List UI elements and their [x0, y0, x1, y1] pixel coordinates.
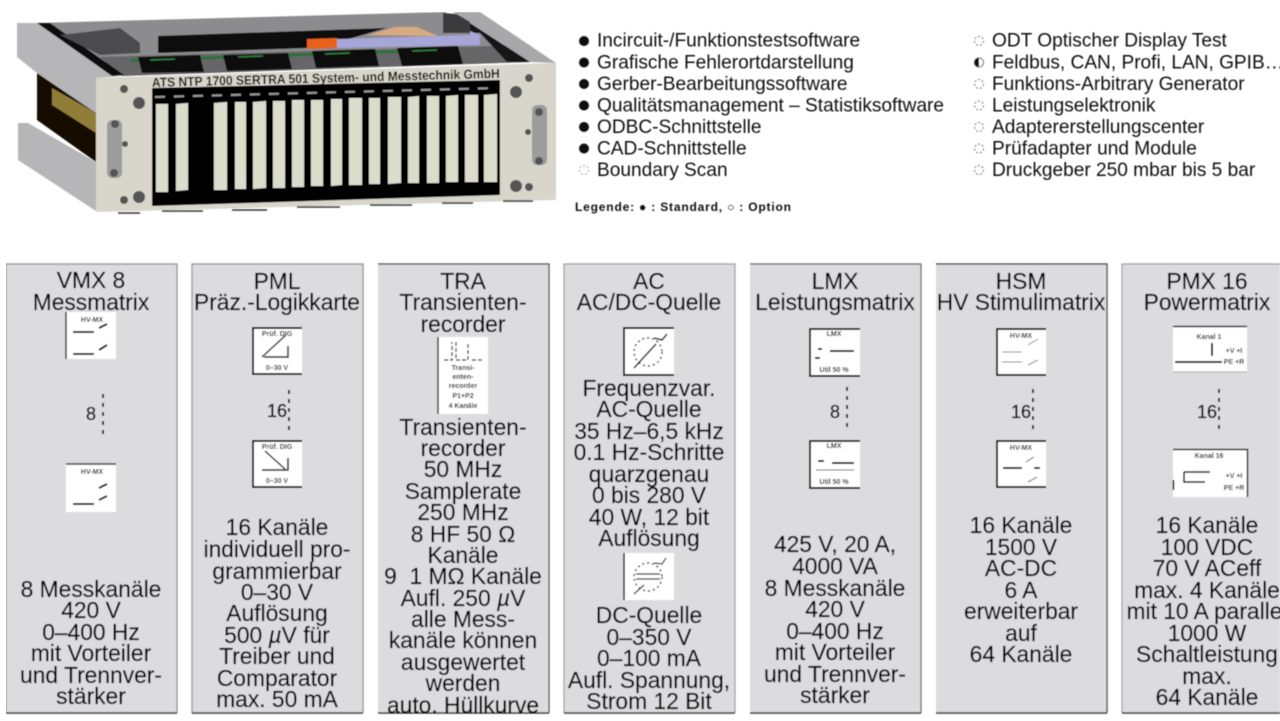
icon: power channel 1 [1173, 326, 1247, 372]
feature list: right column: Funktions-Arbitrary Generator [992, 74, 1245, 95]
TRA description: Samplerate [405, 478, 521, 504]
AC source description: 0.1 Hz-Schritte [574, 439, 724, 465]
TRA description: werden [425, 670, 500, 696]
icon: power matrix bottom [809, 440, 860, 489]
channel count [267, 390, 289, 432]
channel count: 16 [1011, 402, 1031, 422]
icon: logic card bottom [252, 440, 302, 488]
icon: transient recorder: P1+P2 [452, 393, 474, 400]
icon: power matrix bottom: LMX [827, 443, 842, 450]
icon: transient recorder: recorder [449, 383, 477, 390]
front label: ATS NTP 1700 SERTRA 501 System- und Messtechnik GmbH [152, 66, 500, 90]
HSM description: 1500 V [985, 534, 1058, 560]
panel: AC [564, 264, 735, 714]
HSM description: 16 Kanäle [970, 512, 1072, 538]
channel count: 16 [1197, 402, 1217, 422]
panel: VMX 8: Messmatrix [33, 289, 150, 315]
LMX description: mit Vorteiler [775, 639, 896, 665]
HSM description [964, 512, 1078, 667]
PML description: 16 Kanäle [226, 514, 328, 540]
PML description: Auflösung [226, 600, 328, 626]
panel: PML: Präz.-Logikkarte [194, 289, 360, 315]
front black card area [152, 80, 500, 206]
PML description: 0–30 V [241, 579, 314, 605]
icon: HV matrix bottom [996, 440, 1046, 488]
PMX description [1127, 512, 1280, 710]
feature list: right column: Prüfadapter und Module [992, 138, 1197, 160]
icon: transient recorder [438, 337, 488, 414]
icon: logic card top: 0–30 V [266, 365, 288, 372]
LMX description: 0–400 Hz [786, 618, 884, 644]
icon: measuring matrix top: HV-MX [81, 317, 103, 324]
feature list: left column: ODBC-Schnittstelle [597, 117, 761, 138]
VMX description: 420 V [61, 597, 122, 623]
icon: logic card bottom: Prüf. DIG [262, 444, 293, 451]
icon: AC source [623, 327, 674, 376]
TRA description: 8 HF 50 Ω [411, 521, 515, 547]
icon: power channel 16 [1173, 449, 1248, 497]
icon: power channel 16: Kanal 16 [1195, 453, 1224, 460]
AC source description: 35 Hz–6,5 kHz [574, 418, 724, 444]
PMX description: max. 4 Kanäle [1134, 577, 1280, 603]
icon: DC source [623, 553, 674, 600]
panel: AC: AC/DC-Quelle [577, 289, 721, 315]
feature list: right column: Adaptererstellungscenter [992, 117, 1205, 138]
VMX description: stärker [56, 683, 126, 709]
panel: PMX 16: PMX 16 [1166, 268, 1248, 294]
icon: power matrix bottom: Util 50 % [819, 479, 849, 486]
HSM description: 6 A [1005, 577, 1038, 603]
PMX description: Schaltleistung [1136, 641, 1278, 667]
LMX description: 425 V, 20 A, [774, 531, 896, 557]
icon: power matrix top: Util 50 % [819, 367, 849, 374]
LMX description: stärker [800, 682, 870, 708]
legend: Legende: ● : Standard, ○ : Option [575, 200, 791, 214]
panel: HSM [936, 264, 1107, 713]
feature list: left column: Grafische Fehlerortdarstellung [597, 52, 854, 74]
VMX description [20, 576, 162, 709]
AC source description: quarzgenau [589, 461, 709, 487]
HSM description: 64 Kanäle [970, 641, 1072, 667]
TRA description: auto. Hüllkurve [387, 692, 539, 718]
LMX description [764, 531, 906, 708]
icon: transient recorder: 4 Kanäle [449, 403, 478, 410]
TRA description: 9 1 MΩ Kanäle [384, 563, 542, 589]
TRA description: ausgewertet [401, 649, 526, 675]
VMX description: und Trennver- [20, 662, 162, 688]
icon: transient recorder: Transi- [452, 365, 475, 372]
feature list: right column: Leistungselektronik [992, 96, 1156, 116]
icon: power matrix top [809, 328, 860, 377]
icon: HV matrix top: HV-MX [1010, 333, 1032, 340]
feature list: left column: Boundary Scan [597, 160, 728, 181]
TRA description: 250 MHz [417, 499, 509, 525]
channel count [1197, 389, 1219, 431]
PML description: Treiber und [219, 643, 335, 669]
feature list: left column [579, 30, 944, 181]
TRA description: alle Mess- [411, 606, 515, 632]
AC source description: 40 W, 12 bit [589, 504, 710, 530]
icon: logic card top [252, 327, 302, 375]
HSM description: AC-DC [985, 555, 1057, 581]
DC source description: 0–350 V [607, 624, 692, 650]
icon: logic card top: Prüf. DIG [262, 331, 293, 338]
icon: power channel 16: +V +I [1226, 473, 1242, 480]
AC source description: AC-Quelle [596, 396, 702, 422]
feature list: right column: Druckgeber 250 mbar bis 5 bar [992, 160, 1256, 181]
panel: PML [192, 264, 363, 713]
TRA description [384, 414, 542, 718]
channel count [830, 387, 847, 431]
PML description [204, 514, 350, 712]
PMX description: 1000 W [1168, 620, 1247, 646]
panel: VMX 8: VMX 8 [57, 267, 125, 293]
AC source description: Frequenzvar. [582, 375, 716, 401]
panel: HSM: HV Stimulimatrix [937, 289, 1106, 315]
LMX description: 420 V [805, 596, 866, 622]
icon: measuring matrix bottom [66, 464, 116, 512]
AC source description [574, 375, 724, 551]
panel: VMX 8 [6, 264, 177, 713]
PML description: Comparator [217, 665, 338, 691]
feature list: left column: CAD-Schnittstelle [597, 138, 747, 160]
icon: measuring matrix top [66, 312, 116, 359]
TRA description: kanäle können [389, 627, 537, 653]
icon: transient recorder: enten- [452, 374, 474, 381]
slots [156, 94, 497, 192]
PML description: 500 µV für [224, 622, 330, 648]
PMX description: 100 VDC [1161, 534, 1253, 560]
AC source description: 0 bis 280 V [592, 482, 707, 508]
panel: TRA: Transienten- [399, 289, 527, 315]
TRA description: recorder [421, 435, 506, 461]
icon: power channel 1: Kanal 1 [1197, 334, 1222, 341]
front plate [96, 63, 556, 212]
TRA description: 50 MHz [424, 456, 502, 482]
PMX description: 16 Kanäle [1156, 512, 1258, 538]
icon: HV matrix bottom: HV-MX [1010, 445, 1032, 452]
icon: power channel 1: +V +I [1226, 348, 1242, 355]
feature list: left column: Incircuit-/Funktionstestsoftware [597, 30, 860, 52]
icon: measuring matrix bottom: HV-MX [81, 469, 103, 476]
device: 19-inch test rack [17, 12, 556, 213]
channel count: 8 [86, 404, 96, 424]
TRA description: Aufl. 250 µV [401, 585, 526, 611]
DC source description: DC-Quelle [596, 602, 702, 628]
panel: HSM: HSM [996, 268, 1046, 294]
feature list: right column: ODT Optischer Display Test [992, 30, 1228, 52]
panel: PML: PML [254, 268, 300, 294]
icon: power matrix top: LMX [827, 331, 842, 338]
icon: power channel 16: PE +R [1224, 485, 1244, 492]
panel: LMX [750, 264, 921, 713]
panel: TRA: TRA [440, 268, 487, 294]
VMX description: 0–400 Hz [42, 619, 140, 645]
VMX description: mit Vorteiler [31, 640, 152, 666]
DC source description: Aufl. Spannung, [568, 667, 730, 693]
channel count: 16 [267, 401, 287, 421]
channel count [1011, 389, 1033, 431]
feature list: left column: Gerber-Bearbeitungssoftware [597, 74, 847, 95]
PMX description: max. [1182, 663, 1232, 689]
channel count: 8 [830, 402, 840, 422]
panel: AC: AC [633, 268, 665, 294]
DC source description: 0–100 mA [597, 645, 702, 671]
DC source description [568, 602, 730, 714]
feature list: right column [974, 30, 1280, 181]
TRA description: Transienten- [399, 414, 527, 440]
LMX description: 4000 VA [792, 553, 879, 579]
channel count [86, 394, 103, 436]
AC source description: Auflösung [598, 525, 700, 551]
icon: HV matrix top [996, 328, 1046, 376]
VMX description: 8 Messkanäle [21, 576, 161, 602]
DC source description: Strom 12 Bit [586, 688, 712, 714]
panel: TRA: recorder [421, 311, 506, 337]
PMX description: 70 V ACeff [1153, 555, 1262, 581]
feature list: right column: Feldbus, CAN, Profi, LAN, GPIB… [992, 52, 1280, 74]
LMX description: 8 Messkanäle [765, 575, 905, 601]
PML description: grammierbar [212, 558, 342, 584]
panel: LMX: LMX [812, 268, 858, 294]
icon: power channel 1: PE +R [1224, 359, 1244, 366]
panel: TRA [378, 264, 549, 718]
LMX description: und Trennver- [764, 661, 906, 687]
panel: PMX 16: Powermatrix [1144, 289, 1271, 315]
PMX description: 64 Kanäle [1156, 684, 1258, 710]
feature list: left column: Qualitätsmanagement – Statistiksoftware [597, 96, 944, 116]
icon: logic card bottom: 0–30 V [266, 478, 288, 485]
TRA description: Kanäle [428, 542, 498, 568]
HSM description: auf [1005, 620, 1038, 646]
panel: PMX 16 [1122, 264, 1280, 713]
PML description: max. 50 mA [216, 686, 339, 712]
HSM description: erweiterbar [964, 598, 1078, 624]
panel: LMX: Leistungsmatrix [755, 289, 915, 315]
handles [107, 120, 122, 178]
PML description: individuell pro- [204, 536, 350, 562]
